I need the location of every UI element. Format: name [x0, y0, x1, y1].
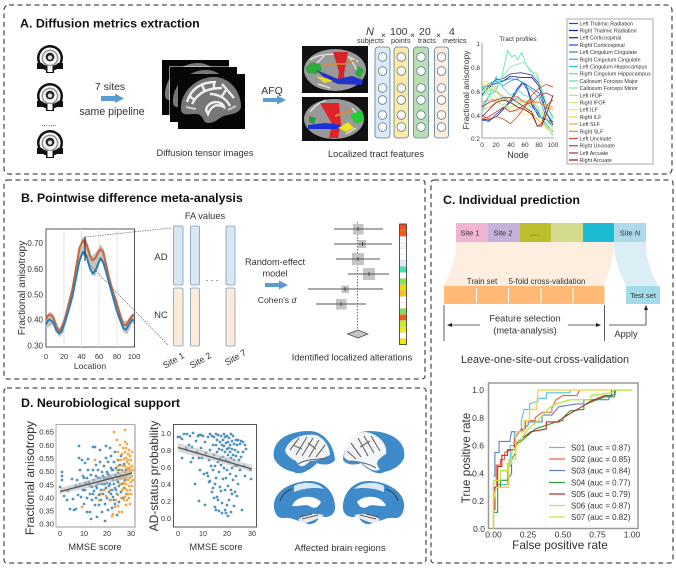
- ROC legend: S05 (auc = 0.79): [571, 490, 631, 499]
- colour bar: localized alterations: [400, 224, 406, 344]
- label: random-effect model: Random-effect: [245, 257, 305, 267]
- chart: FA along location: 0.50: [27, 290, 44, 300]
- legend: tracts: Right Uncinate: [580, 144, 615, 150]
- chart: tract profiles: 80: [535, 142, 543, 149]
- image stack: diffusion tensor images: [162, 60, 245, 129]
- caption: affected brain regions: Affected brain regions: [294, 542, 386, 553]
- chart: ROC curves: 0.2: [472, 496, 484, 506]
- brain maps: affected regions: [274, 431, 404, 524]
- ROC legend: S03 (auc = 0.84): [571, 466, 631, 476]
- site bar: Site 1: [460, 228, 480, 238]
- legend: tracts: Callosum Forceps Major: [580, 79, 638, 85]
- dimension labels: ×: [381, 30, 386, 40]
- chart: AD-status probability vs MMSE scatter: 0.8: [161, 446, 171, 455]
- chart: ROC curves: False positive rate: [512, 538, 608, 552]
- train set labels: 5-fold cross-validation: [509, 277, 585, 286]
- chart: tract profiles: 0.8: [471, 65, 480, 72]
- chart: FA vs MMSE scatter: 20: [103, 529, 111, 538]
- chart: FA along location: 0.30: [27, 342, 44, 350]
- dimension labels: points: [391, 36, 411, 45]
- legend: tracts: Right Cingulum Hippocampus: [580, 72, 651, 78]
- label: Cohen's d: Cohen's d: [258, 295, 296, 305]
- panel C: individual prediction: [431, 180, 673, 563]
- site columns: [174, 226, 235, 346]
- legend: tracts: Right Arcuate: [580, 158, 612, 164]
- site bar: Site 2: [493, 228, 513, 238]
- site labels: Site 7: [223, 347, 248, 367]
- legend: tracts: Left Corticospinal: [580, 36, 621, 42]
- chart: tract profiles: 40: [507, 142, 515, 149]
- chart: FA along location: 0.60: [27, 265, 44, 274]
- chart: tract profiles: 0.4: [471, 113, 480, 120]
- label: random-effect model: model: [262, 268, 288, 278]
- legend: tracts: Left ILF: [580, 108, 598, 114]
- ROC legend: S04 (auc = 0.77): [571, 478, 631, 488]
- icon: MRI scanners: .......: [41, 119, 57, 128]
- chart: FA vs MMSE scatter: Fractional anisotropy: [23, 420, 37, 535]
- legend: tracts: Left Arcuate: [580, 151, 608, 157]
- chart: tract profiles: 60: [521, 142, 529, 149]
- chart: FA vs MMSE scatter: 0.45: [39, 480, 54, 490]
- chart: FA along location: 20: [60, 352, 68, 361]
- chart: AD-status probability vs MMSE scatter: [147, 421, 256, 552]
- chart: FA vs MMSE scatter: 10: [80, 529, 88, 538]
- chart: tract profiles: 0: [480, 142, 484, 149]
- train flow band: [444, 242, 614, 286]
- panel D title: D. Neurobiological support: [21, 396, 180, 410]
- ROC legend: [546, 442, 634, 526]
- chart: FA vs MMSE scatter: 0.50: [39, 467, 54, 476]
- chart: tract profiles: Fractional anisotropy: [461, 50, 471, 129]
- site labels: Site 1: [161, 350, 186, 370]
- site labels: [161, 347, 248, 370]
- forest plot: [308, 222, 392, 338]
- chart: tract profiles: 20: [492, 142, 500, 149]
- test set box: Test set: [630, 291, 657, 300]
- chart: FA vs MMSE scatter: 0: [58, 529, 62, 538]
- dimension labels: ×: [410, 30, 415, 40]
- legend: tracts: Right IFOF: [580, 100, 607, 106]
- dimension labels: N: [366, 26, 374, 38]
- chart: FA along location: Fractional anisotropy: [17, 240, 28, 335]
- chart: ROC curves: 0.50: [555, 530, 572, 540]
- chart: ROC curves: 0.8: [472, 413, 484, 423]
- caption: identified localized alterations: Identified localized alterations: [292, 352, 413, 362]
- chart: AD-status probability vs MMSE scatter: 30: [248, 529, 256, 538]
- ROC legend: S07 (auc = 0.82): [571, 513, 631, 522]
- legend: tracts: Left SLF: [580, 122, 601, 128]
- arrow: apply: [609, 305, 648, 325]
- chart: FA along location: 80: [113, 352, 121, 361]
- chart: AD-status probability vs MMSE scatter: 0.4: [161, 480, 171, 489]
- legend: tracts: [567, 19, 653, 164]
- site bar: [456, 223, 646, 242]
- legend: tracts: Right Corticospinal: [580, 43, 625, 49]
- legend: tracts: Right SLF: [580, 129, 604, 135]
- chart: ROC curves: 1.0: [472, 385, 484, 395]
- legend: tracts: Right ILF: [580, 115, 602, 121]
- chart: FA vs MMSE scatter: [23, 420, 135, 552]
- panel A title: A. Diffusion metrics extraction: [20, 16, 200, 30]
- chart: FA along location: 0.40: [27, 316, 44, 324]
- chart: FA vs MMSE scatter: 0.60: [39, 441, 54, 450]
- label: random-effect model: [245, 257, 305, 278]
- label: 7 sites: 7 sites: [95, 81, 125, 93]
- label: same pipeline: same pipeline: [79, 106, 145, 118]
- chart: FA along location: 40: [77, 352, 86, 361]
- legend: tracts: Left Thalmic Radiation: [580, 22, 633, 28]
- chart: AD-status probability vs MMSE scatter: 0.6: [161, 463, 171, 472]
- dimension labels: 4: [449, 26, 455, 38]
- dimension labels: subjects: [357, 36, 384, 45]
- chart: FA along location: [17, 229, 140, 371]
- zoom connector lines: [85, 228, 171, 345]
- chart: FA vs MMSE scatter: MMSE score: [68, 542, 122, 552]
- chart: ROC curves: [459, 383, 641, 552]
- chart: ROC curves: True positive rate: [459, 412, 473, 503]
- chart: AD-status probability vs MMSE scatter: 0.2: [161, 497, 171, 506]
- chart: FA along location: 100: [128, 352, 140, 361]
- panel C title: C. Individual prediction: [443, 193, 580, 207]
- train set labels: Train set: [467, 277, 498, 286]
- chart: ROC curves: 0.0: [473, 524, 485, 534]
- feature selection span: Feature selection: [489, 314, 561, 324]
- train set labels: [467, 277, 585, 286]
- train set bar: [444, 286, 604, 304]
- chart: AD-status probability vs MMSE scatter: MMSE score: [189, 542, 243, 552]
- chart: FA vs MMSE scatter: 0.35: [39, 506, 54, 516]
- chart: ROC curves: 0.75: [589, 530, 606, 540]
- arrow: sites to images: [101, 94, 124, 103]
- caption: diffusion tensor images: Diffusion tensor images: [157, 148, 254, 158]
- chart: AD-status probability vs MMSE scatter: AD-status probability: [147, 421, 161, 531]
- chart: AD-status probability vs MMSE scatter: 10: [199, 529, 207, 538]
- dimension labels: 20: [419, 26, 431, 38]
- ROC legend: S06 (auc = 0.87): [571, 502, 631, 510]
- legend: tracts: Left Cingulum Hippocampus: [580, 64, 648, 70]
- icon: MRI scanners: [37, 45, 63, 158]
- chart: ROC curves: 0.4: [472, 468, 484, 478]
- panel B title: B. Pointwise difference meta-analysis: [21, 191, 243, 205]
- caption: leave-one-site-out: Leave-one-site-out cross-validation: [461, 354, 629, 366]
- legend: tracts: Left Uncinate: [580, 136, 611, 142]
- label: AD: AD: [154, 252, 168, 263]
- label: FA values: FA values: [185, 211, 226, 221]
- site bar: ......: [530, 232, 540, 238]
- feature selection span: [444, 305, 604, 341]
- chart: AD-status probability vs MMSE scatter: 0.0: [161, 514, 171, 523]
- dimension labels: metrics: [443, 36, 467, 45]
- chart: FA along location: Location: [74, 361, 106, 371]
- panel D: neurobiological support: [4, 388, 426, 563]
- chart: ROC curves: 0.00: [485, 530, 502, 540]
- site labels: Site 2: [188, 350, 213, 370]
- chart: FA vs MMSE scatter: 0.30: [39, 520, 54, 528]
- chart: tract profiles: Tract profiles: [499, 36, 537, 43]
- dimension labels: 100: [390, 26, 408, 38]
- feature columns: [375, 47, 448, 138]
- chart: tract profiles: 100: [548, 142, 559, 149]
- dimension labels: [357, 26, 467, 45]
- legend: tracts: Right Thalmic Radiation: [580, 28, 637, 34]
- legend: tracts: Callosum Forceps Minor: [580, 86, 638, 92]
- site bar: Site N: [620, 228, 641, 238]
- ROC legend: S02 (auc = 0.85): [571, 455, 631, 464]
- chart: tract profiles: 1: [476, 41, 480, 48]
- chart: ROC curves: 0.25: [520, 530, 537, 540]
- chart: FA vs MMSE scatter: 0.55: [39, 454, 54, 463]
- chart: FA along location: 60: [95, 352, 103, 361]
- arrow: to forest plot: [265, 280, 288, 290]
- chart: tract profiles: 0.2: [471, 136, 480, 143]
- chart: FA along location: 0: [44, 352, 48, 361]
- chart: FA along location: 0.70: [27, 239, 44, 248]
- chart: FA vs MMSE scatter: 0.40: [39, 494, 54, 502]
- chart: AD-status probability vs MMSE scatter: 1.0: [161, 429, 171, 438]
- ellipsis between sites: . . .: [206, 273, 218, 283]
- brain tract image top: [302, 46, 368, 93]
- chart: AD-status probability vs MMSE scatter: 0: [176, 529, 180, 538]
- legend: tracts: Left Cingulum Cingulate: [580, 50, 637, 56]
- dimension labels: tracts: [418, 36, 436, 45]
- chart: FA vs MMSE scatter: 30: [127, 529, 135, 538]
- feature selection span: (meta-analysis): [493, 326, 557, 336]
- brain tract image bottom: [302, 97, 368, 141]
- test flow band: [614, 242, 658, 286]
- dimension labels: ×: [436, 30, 441, 40]
- label: AFQ: AFQ: [261, 85, 283, 97]
- chart: tract profiles: Node: [507, 150, 529, 160]
- chart: ROC curves: 0.6: [472, 440, 484, 450]
- arrow: AFQ: [263, 96, 286, 104]
- legend: tracts: Left IFOF: [580, 93, 603, 99]
- panel A: diffusion metrics extraction: [4, 5, 672, 174]
- chart: ROC curves: 1.00: [624, 530, 641, 540]
- chart: tract profiles: [461, 36, 559, 160]
- label: apply: Apply: [614, 329, 638, 339]
- test set box: [626, 286, 660, 304]
- caption: localized tract features: Localized tract features: [328, 149, 424, 159]
- chart: FA vs MMSE scatter: 0.65: [39, 428, 54, 436]
- chart: tract profiles: 0.6: [471, 89, 480, 96]
- chart: AD-status probability vs MMSE scatter: 20: [223, 529, 231, 538]
- ROC legend: S01 (auc = 0.87): [571, 444, 631, 452]
- panel B: pointwise difference meta-analysis: [4, 180, 425, 379]
- label: NC: NC: [154, 310, 168, 321]
- legend: tracts: Right Cingulum Cingulate: [580, 57, 641, 63]
